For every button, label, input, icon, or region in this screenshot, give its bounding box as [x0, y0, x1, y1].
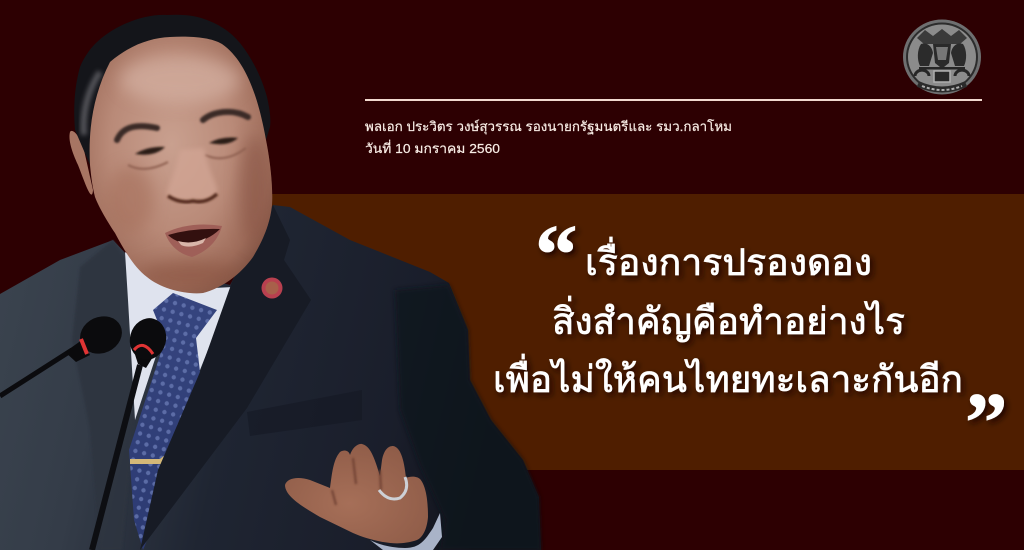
hair highlight: [84, 72, 100, 135]
date: วันที่ 10 มกราคม 2560: [365, 140, 500, 156]
eye creases: [128, 148, 246, 169]
sleeve shading: [395, 285, 541, 550]
ring: [379, 477, 407, 499]
emblem: government seal: [903, 20, 981, 94]
lapel pin: [262, 278, 282, 298]
ear: [69, 131, 93, 195]
quote line 1: เรื่องการปรองดอง: [585, 236, 872, 283]
tie clip: [130, 455, 170, 468]
eyes: [135, 138, 238, 155]
centre microphone: [92, 314, 171, 550]
opening quotation mark: “: [535, 208, 578, 302]
text block: speaker and date: [365, 119, 732, 156]
quote text: [493, 208, 1008, 470]
quote line 2: สิ่งสำคัญคือทำอย่างไร: [552, 295, 905, 343]
white shirt: [125, 252, 233, 420]
photo: speaker at microphones: [0, 15, 541, 550]
left microphone: [0, 310, 128, 396]
hair: [74, 15, 270, 165]
nose: [167, 148, 217, 201]
left lapel: [72, 240, 134, 550]
mouth: [165, 225, 222, 257]
closing quotation mark: ”: [965, 376, 1008, 470]
neck tie: [129, 293, 217, 550]
face: [90, 37, 272, 293]
quote line 3: เพื่อไม่ให้คนไทยทะเลาะกันอีก: [493, 353, 963, 400]
speaker name: พลเอก ประวิตร วงษ์สุวรรณ รองนายกรัฐมนตรีและ รมว.กลาโหม: [365, 119, 732, 135]
right hand with ring: [285, 444, 428, 543]
breast pocket: [247, 390, 362, 436]
right lapel: [140, 205, 311, 550]
divider rule: [365, 99, 982, 101]
eyebrows: [117, 112, 248, 140]
shirt cuff: [370, 513, 442, 550]
suit body: [0, 205, 541, 550]
panel: quote band: [240, 194, 1024, 470]
